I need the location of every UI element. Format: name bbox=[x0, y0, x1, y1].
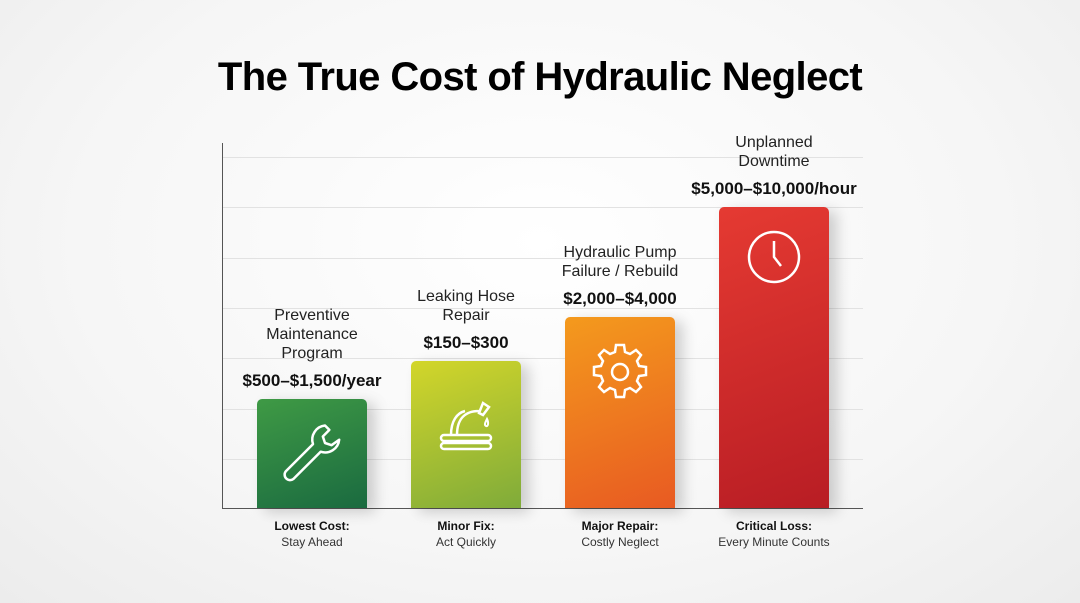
bar: preventive maintenance bbox=[257, 399, 367, 508]
label: hose: Repair bbox=[442, 307, 490, 324]
caption 3 bbox=[581, 519, 659, 549]
label: pump: Hydraulic Pump bbox=[564, 244, 676, 261]
label: preventive: Program bbox=[281, 345, 343, 362]
caption 4: Every Minute Counts bbox=[718, 535, 830, 549]
label: downtime: Downtime bbox=[738, 153, 810, 170]
icon: wrench bbox=[283, 424, 340, 482]
caption 1 bbox=[274, 519, 350, 549]
label: preventive: $500–$1,500/year bbox=[242, 371, 381, 390]
caption 1: Stay Ahead bbox=[281, 535, 343, 549]
label: pump: Failure / Rebuild bbox=[562, 263, 678, 280]
icon: gear bbox=[592, 344, 648, 398]
label: hose: Leaking Hose bbox=[417, 288, 515, 305]
caption 3: Major Repair: bbox=[582, 519, 658, 533]
caption 2: Minor Fix: bbox=[437, 519, 495, 533]
caption 4: Critical Loss: bbox=[736, 519, 812, 533]
bar: leaking hose bbox=[411, 361, 521, 508]
caption 3: Costly Neglect bbox=[581, 535, 659, 549]
label: hose bbox=[417, 288, 515, 352]
icon: clock bbox=[748, 230, 800, 284]
label: preventive: Preventive bbox=[274, 307, 350, 324]
bar: pump failure bbox=[565, 317, 675, 508]
label: pump: $2,000–$4,000 bbox=[563, 289, 677, 308]
title: The True Cost of Hydraulic Neglect bbox=[218, 55, 862, 99]
label: downtime: Unplanned bbox=[735, 134, 813, 151]
label: pump bbox=[562, 244, 678, 308]
caption 2 bbox=[436, 519, 496, 549]
caption 1: Lowest Cost: bbox=[274, 519, 350, 533]
label: preventive: Maintenance bbox=[266, 326, 358, 343]
label: downtime bbox=[691, 134, 857, 198]
label: downtime: $5,000–$10,000/hour bbox=[691, 179, 857, 198]
caption 2: Act Quickly bbox=[436, 535, 496, 549]
label: hose: $150–$300 bbox=[423, 333, 509, 352]
icon: hose bbox=[440, 401, 492, 450]
bar: downtime bbox=[719, 207, 829, 508]
label: preventive bbox=[242, 307, 382, 390]
caption 4 bbox=[718, 519, 830, 549]
